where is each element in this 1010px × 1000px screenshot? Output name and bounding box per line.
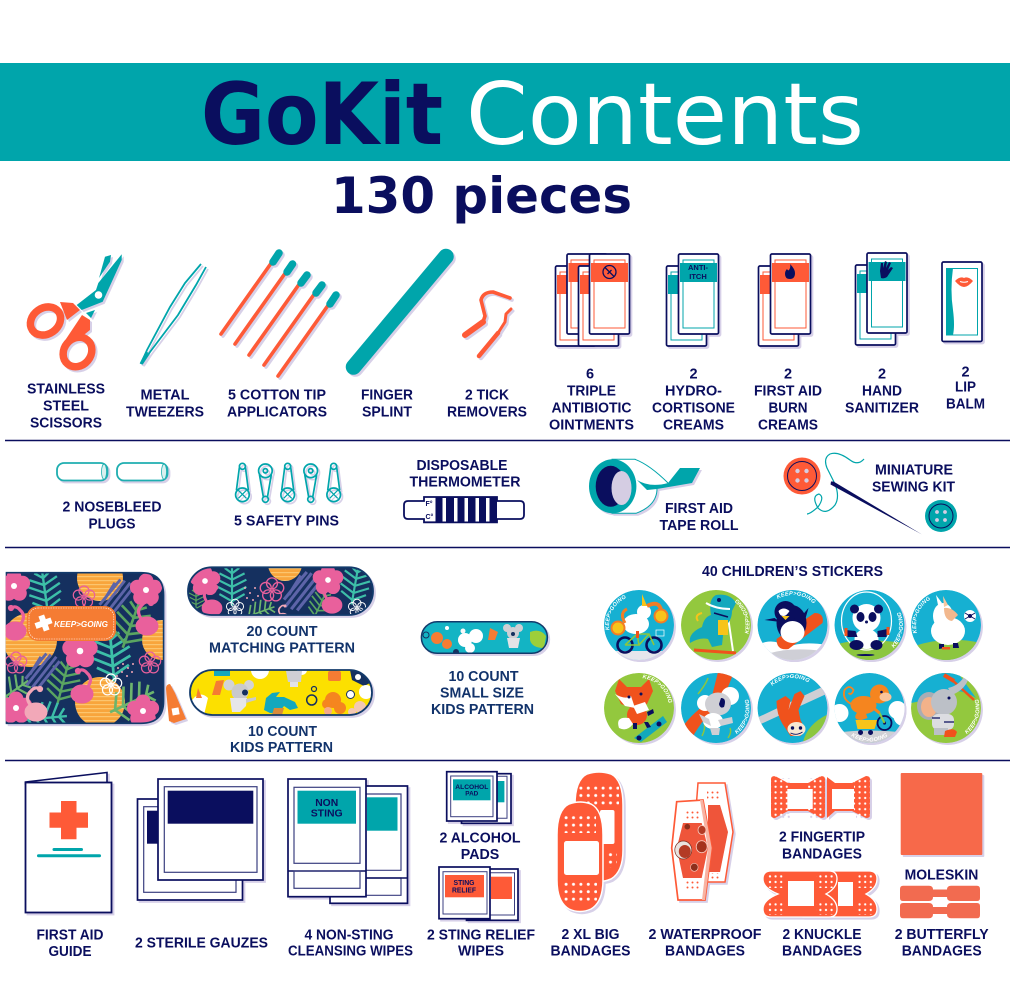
label: finger splint <box>361 388 413 420</box>
icon: thermometer <box>404 497 524 522</box>
label: first aid burn creams: FIRST AID <box>754 384 822 400</box>
label: hand sanitizer: 2 <box>878 366 886 382</box>
label: first aid burn creams: CREAMS <box>758 418 818 434</box>
icon: hydrocortisone creams: ANTI- <box>688 263 708 272</box>
label: fingertip bandages: BANDAGES <box>782 846 862 862</box>
label: hand sanitizer: HAND <box>862 384 902 400</box>
label: fingertip bandages <box>779 830 865 862</box>
panel: tools and creams row <box>25 253 985 434</box>
label: 10 count small size kids pattern: KIDS PATTERN <box>431 702 534 718</box>
icon: tape roll <box>589 459 700 513</box>
icon: triple antibiotic ointments <box>556 254 630 346</box>
pouch label patch: KEEP>GOING <box>54 619 108 629</box>
label: tape roll: FIRST AID <box>665 501 733 517</box>
label: alcohol pads: 2 ALCOHOL <box>440 830 521 846</box>
label: hand sanitizer <box>845 366 920 416</box>
icon: sterile gauzes <box>138 779 263 900</box>
label: tape roll: TAPE ROLL <box>660 518 739 534</box>
icon: hydrocortisone creams: ITCH <box>689 272 707 281</box>
sticker: llama: KEEP>GOING <box>912 596 930 634</box>
label: triple antibiotic ointments: ANTIBIOTIC <box>552 400 632 416</box>
label: fingertip bandages: 2 FINGERTIP <box>779 830 865 846</box>
icon: bandage small kids pattern <box>421 621 548 655</box>
title <box>201 65 864 165</box>
icon: non-sting cleansing wipes: STING <box>311 808 343 820</box>
label: non-sting cleansing wipes <box>288 927 413 960</box>
label: hydrocortisone creams <box>652 366 735 434</box>
label: stickers heading: 40 CHILDREN’S STICKERS <box>702 564 883 580</box>
label: cotton tip applicators: 5 COTTON TIP <box>228 388 326 404</box>
sticker: unicorn: KEEP>GOING <box>605 595 626 630</box>
icon: sting relief wipes <box>439 867 518 920</box>
label: sting relief wipes: WIPES <box>458 944 504 960</box>
icon: finger splint <box>354 256 446 367</box>
label: knuckle bandages <box>782 927 862 960</box>
icon: tweezers <box>141 264 206 364</box>
icon: scissors <box>25 254 122 373</box>
label: sewing kit: SEWING KIT <box>872 480 955 496</box>
icon: waterproof bandages <box>672 783 733 900</box>
label: lip balm: 2 <box>961 364 970 380</box>
label: XL big bandages: BANDAGES <box>550 944 631 960</box>
icon: alcohol pads: ALCOHOL <box>455 784 488 791</box>
sticker: elephant: KEEP>GOING <box>964 700 980 734</box>
label: tick removers: 2 TICK <box>465 388 510 404</box>
sticker: monkey: KEEP>GOING <box>851 733 888 742</box>
sticker: elephant <box>911 673 983 745</box>
label: XL big bandages: 2 XL BIG <box>562 927 620 943</box>
icon: alcohol pads <box>447 772 511 823</box>
icon: XL big bandages <box>557 772 623 912</box>
label: tape roll <box>660 501 739 534</box>
label: triple antibiotic ointments: OINTMENTS <box>549 418 634 434</box>
label: moleskin: MOLESKIN <box>905 867 978 883</box>
label: butterfly bandages: 2 BUTTERFLY <box>895 927 989 943</box>
label: 10 count kids pattern <box>230 724 333 756</box>
icon: hand sanitizer <box>856 253 907 345</box>
label: 10 count small size kids pattern: SMALL SIZE <box>440 686 524 702</box>
sticker: dinosaur: KEEP>GOING <box>735 600 750 634</box>
label: knuckle bandages: 2 KNUCKLE <box>782 927 862 943</box>
label: non-sting cleansing wipes: 4 NON-STING <box>304 927 394 943</box>
label: sting relief wipes <box>427 927 535 960</box>
sticker: fox <box>604 673 676 745</box>
label: finger splint: FINGER <box>361 388 413 404</box>
label: tweezers <box>126 388 204 420</box>
label: hydrocortisone creams: CREAMS <box>663 418 724 434</box>
sticker: llama <box>911 590 983 662</box>
panel: pouch, bandage patterns and stickers row <box>6 564 983 756</box>
label: 20 count matching pattern: 20 COUNT <box>246 624 318 640</box>
sticker: koala <box>681 673 753 745</box>
label: triple antibiotic ointments: 6 <box>586 366 594 382</box>
label: hydrocortisone creams: 2 <box>689 366 698 382</box>
sticker: dinosaur <box>681 590 753 662</box>
label: hydrocortisone creams: HYDRO- <box>665 384 722 400</box>
label: sting relief wipes: 2 STING RELIEF <box>427 927 535 943</box>
label: butterfly bandages <box>895 927 989 960</box>
icon: non-sting cleansing wipes <box>288 779 408 903</box>
label: waterproof bandages <box>648 927 762 960</box>
label: alcohol pads: PADS <box>461 847 500 863</box>
label: lip balm <box>946 364 985 412</box>
sticker: penguin: KEEP>GOING <box>776 591 816 603</box>
icon: hydrocortisone creams <box>666 254 718 346</box>
label: thermometer <box>410 458 521 490</box>
label: 10 count small size kids pattern: 10 COUNT <box>448 669 519 685</box>
label: first aid burn creams <box>754 366 822 434</box>
label: first aid burn creams: 2 <box>784 366 792 382</box>
icon: lip balm <box>942 262 982 342</box>
icon: thermometer: C° <box>426 513 434 521</box>
label: thermometer: THERMOMETER <box>410 474 521 490</box>
label: non-sting cleansing wipes: CLEANSING WIPES <box>288 944 413 960</box>
label: scissors <box>27 382 105 432</box>
sticker: sloth: KEEP>GOING <box>770 674 810 686</box>
subtitle: piece count: 130 pieces <box>331 167 632 225</box>
label: nosebleed plugs <box>62 500 162 532</box>
label: nosebleed plugs: PLUGS <box>88 516 136 532</box>
icon: tick removers <box>465 292 511 356</box>
label: 10 count small size kids pattern <box>431 669 534 718</box>
sticker: sloth <box>758 673 830 745</box>
label: 20 count matching pattern <box>209 624 355 656</box>
label: hand sanitizer: SANITIZER <box>845 400 920 416</box>
label: first aid guide <box>36 927 104 960</box>
sticker: monkey <box>834 673 906 745</box>
panel: small supplies row <box>57 453 957 534</box>
label: triple antibiotic ointments <box>549 366 634 434</box>
sticker: penguin <box>758 590 830 662</box>
label: first aid guide: FIRST AID <box>36 927 104 943</box>
label: triple antibiotic ointments: TRIPLE <box>567 384 616 400</box>
icon: sting relief wipes: STING <box>454 880 475 887</box>
label: butterfly bandages: BANDAGES <box>902 944 982 960</box>
label: waterproof bandages: 2 WATERPROOF <box>648 927 762 943</box>
sticker: fox: KEEP>GOING <box>642 674 672 703</box>
icon: first aid burn creams <box>758 254 810 346</box>
icon: non-sting cleansing wipes: NON <box>315 797 338 809</box>
label: scissors: STEEL <box>43 398 89 414</box>
label: alcohol pads <box>440 830 521 863</box>
label: sewing kit: MINIATURE <box>875 462 953 478</box>
label: hydrocortisone creams: CORTISONE <box>652 400 735 416</box>
panel: guides, wipes and bandages row <box>26 772 989 960</box>
header banner <box>0 63 1010 161</box>
label: scissors: SCISSORS <box>30 416 102 432</box>
label: tick removers <box>447 388 527 420</box>
icon: patterned pouch <box>6 572 166 726</box>
label: 20 count matching pattern: MATCHING PATTERN <box>209 640 355 656</box>
label: sewing kit <box>872 462 955 496</box>
icon: bandage kids pattern <box>189 669 375 718</box>
label: 10 count kids pattern: KIDS PATTERN <box>230 740 333 756</box>
sticker: koala: KEEP>GOING <box>734 700 750 734</box>
icon: bandage matching pattern <box>187 566 376 618</box>
label: 10 count kids pattern: 10 COUNT <box>248 724 317 740</box>
icon: cotton tip applicators <box>221 253 336 376</box>
title: GoKit <box>201 65 443 165</box>
label: scissors: STAINLESS <box>27 382 105 398</box>
label: tweezers: TWEEZERS <box>126 404 204 420</box>
label: nosebleed plugs: 2 NOSEBLEED <box>62 500 162 516</box>
sticker: panda: KEEP>GOING <box>892 612 903 648</box>
icon: first aid guide <box>26 772 112 912</box>
icon: knuckle bandages <box>763 871 877 917</box>
icon: safety pins <box>236 463 341 502</box>
label: thermometer: DISPOSABLE <box>416 458 508 474</box>
label: knuckle bandages: BANDAGES <box>782 944 862 960</box>
icon: sewing kit <box>784 453 957 534</box>
pouch label patch <box>27 606 116 641</box>
icon: thermometer: F° <box>426 500 433 508</box>
label: first aid burn creams: BURN <box>768 400 808 416</box>
icon: nosebleed plugs <box>57 463 168 480</box>
label: cotton tip applicators <box>227 388 327 420</box>
icon: alcohol pads: PAD <box>465 790 479 798</box>
label: cotton tip applicators: APPLICATORS <box>227 404 327 420</box>
icon: sting relief wipes: RELIEF <box>452 887 477 894</box>
label: sterile gauzes: 2 STERILE GAUZES <box>135 935 268 951</box>
label: waterproof bandages: BANDAGES <box>665 944 745 960</box>
icon: fingertip bandages <box>771 776 870 818</box>
label: XL big bandages <box>550 927 631 960</box>
title: Contents <box>466 65 864 165</box>
sticker: unicorn <box>604 590 676 662</box>
label: first aid guide: GUIDE <box>48 944 92 960</box>
icon: pouch zipper pull <box>166 684 186 723</box>
label: safety pins: 5 SAFETY PINS <box>234 514 339 530</box>
icon: moleskin <box>901 773 982 855</box>
sticker: panda <box>834 590 906 662</box>
label: lip balm: BALM <box>946 396 985 412</box>
label: finger splint: SPLINT <box>362 404 412 420</box>
label: lip balm: LIP <box>955 380 976 396</box>
label: tweezers: METAL <box>140 388 190 404</box>
label: tick removers: REMOVERS <box>447 404 527 420</box>
icon: butterfly bandages <box>900 886 980 918</box>
